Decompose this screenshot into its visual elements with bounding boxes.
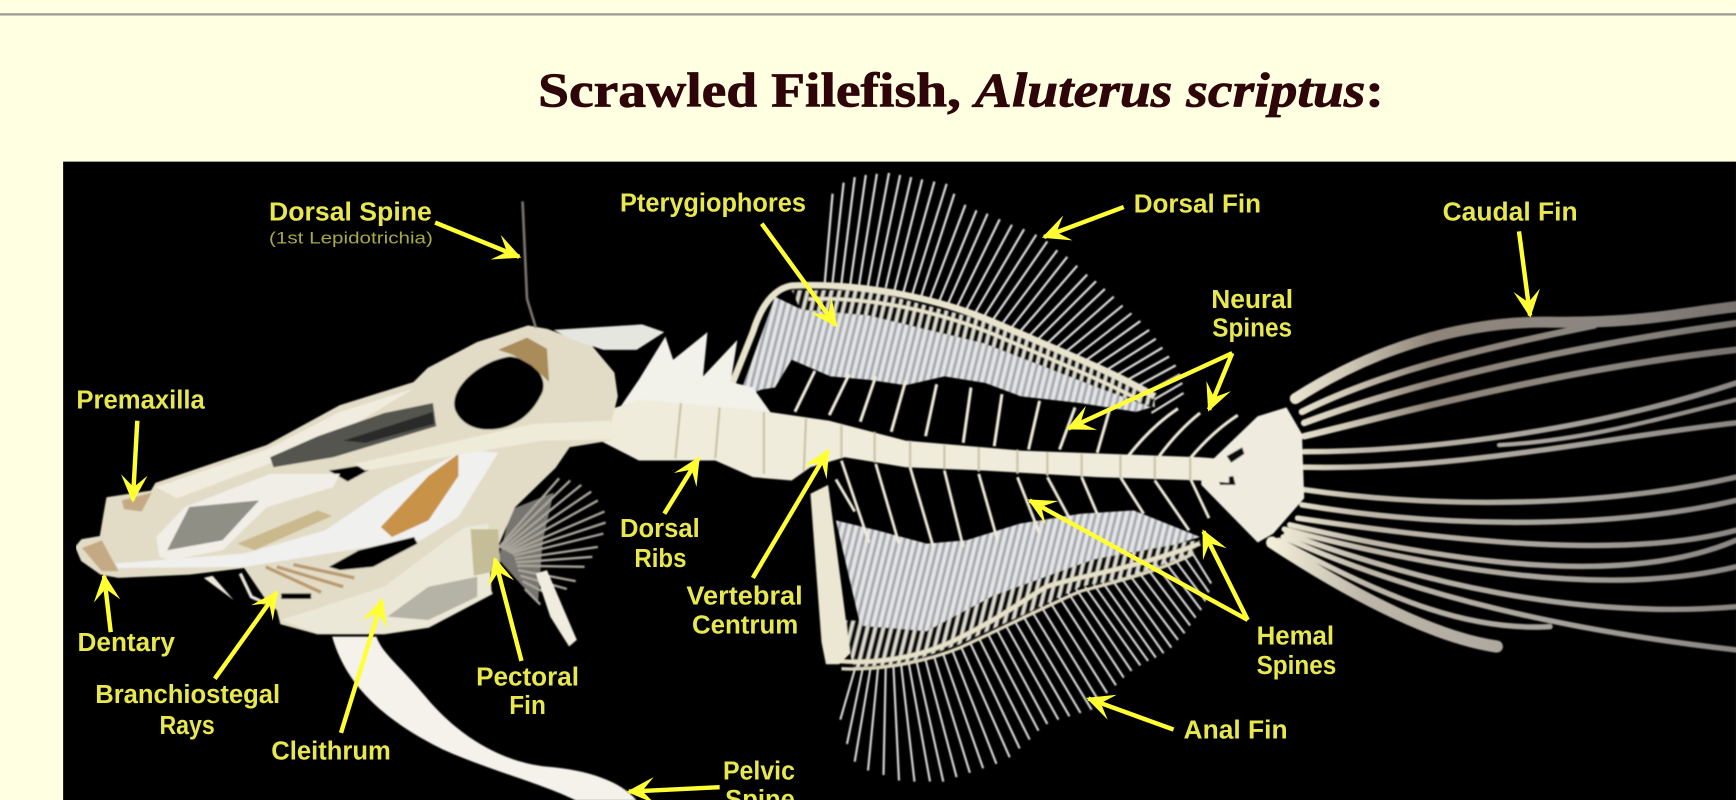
vertebral column bbox=[600, 400, 1229, 483]
caudal fin bbox=[1272, 307, 1736, 650]
arrow: pterygiophores bbox=[762, 224, 836, 325]
arrow: pelvic spine bbox=[629, 787, 720, 792]
label: Branchiostegal Rays: Branchiostegal bbox=[95, 681, 280, 709]
skull black gap bbox=[329, 462, 384, 482]
label: Vertebral Centrum: Centrum bbox=[692, 611, 798, 639]
arrow: dentary bbox=[104, 576, 111, 632]
skull roof highlight bbox=[156, 389, 414, 498]
anal strut bbox=[810, 485, 850, 664]
arrow: pectoral fin bbox=[495, 559, 521, 661]
eye socket bbox=[454, 356, 544, 430]
dorsal inner rail bbox=[808, 299, 1140, 401]
pectoral fin bbox=[498, 478, 606, 647]
arrow: anal fin bbox=[1088, 699, 1174, 730]
jaw spike bbox=[204, 576, 234, 600]
label: Dentary: Dentary bbox=[78, 629, 176, 657]
label: Dorsal Ribs bbox=[620, 515, 700, 573]
label: Pectoral Fin bbox=[476, 663, 579, 720]
arrow: dorsal ribs bbox=[664, 458, 699, 514]
orbit brown rim bbox=[498, 338, 549, 382]
arrow: caudal fin bbox=[1519, 231, 1530, 316]
arrow: premaxilla bbox=[133, 421, 137, 500]
pelvic spine bbox=[332, 637, 637, 800]
label: Vertebral Centrum bbox=[686, 582, 803, 639]
dorsal rail bbox=[726, 285, 1155, 399]
pectoral base bbox=[471, 529, 500, 576]
skull bbox=[76, 327, 617, 633]
title: Scrawled Filefish, Aluterus scriptus : bbox=[538, 63, 1384, 117]
branchiostegal strands bbox=[266, 565, 354, 592]
label: Anal Fin: Anal Fin bbox=[1184, 716, 1288, 744]
label: Neural Spines: Neural bbox=[1211, 286, 1293, 314]
dorsal fin ray bases bbox=[792, 290, 1155, 407]
arrow: cleithrum bbox=[341, 600, 382, 733]
arrow: dorsal fin bbox=[1044, 207, 1124, 237]
anal fin rays bbox=[840, 551, 1211, 782]
label: Dorsal Ribs: Dorsal bbox=[620, 515, 700, 543]
pterygiophores dorsal bbox=[737, 297, 1151, 412]
mid white plate bbox=[115, 449, 498, 568]
label: Caudal Fin: Caudal Fin bbox=[1443, 198, 1578, 226]
label: Neural Spines bbox=[1211, 286, 1293, 343]
arrows: hemal spines bbox=[1030, 500, 1248, 620]
label: Pectoral Fin: Pectoral bbox=[476, 663, 579, 691]
jaw plate grey bbox=[167, 500, 259, 550]
hypural holes bbox=[1218, 447, 1244, 485]
label: Premaxilla: Premaxilla bbox=[76, 387, 206, 415]
label: Hemal Spines bbox=[1257, 622, 1336, 680]
skull grey window bbox=[270, 403, 436, 467]
anal fin ray bases bbox=[841, 540, 1200, 668]
anal fin pale band bbox=[836, 510, 1200, 631]
anal rail bbox=[836, 544, 1200, 662]
arrow: dorsal spine bbox=[435, 223, 519, 257]
vertebra marks bbox=[675, 403, 1190, 480]
branchiostegal ray bbox=[240, 573, 266, 603]
label: Pectoral Fin: Fin bbox=[509, 692, 546, 720]
anterior neural spines bbox=[620, 332, 775, 418]
hemal spines bbox=[836, 461, 1209, 547]
label: Pelvic Spine bbox=[723, 757, 795, 800]
skeleton illustration bbox=[76, 173, 1736, 800]
cleithrum plate bbox=[281, 524, 492, 633]
dorsal fin rays bbox=[825, 173, 1184, 413]
dark window core bbox=[343, 412, 434, 443]
cleithrum shadow bbox=[388, 577, 477, 620]
left plate bbox=[156, 474, 340, 560]
label: Vertebral Centrum: Vertebral bbox=[686, 582, 803, 610]
label: Cleithrum: Cleithrum bbox=[271, 737, 391, 765]
spine rest bone bbox=[554, 324, 664, 350]
dorsal spine bbox=[523, 201, 536, 328]
label: Branchiostegal Rays: Rays bbox=[159, 712, 215, 740]
label: Branchiostegal Rays bbox=[95, 681, 280, 740]
orange patch bbox=[381, 454, 458, 537]
label: Pelvic Spine: Pelvic bbox=[723, 757, 795, 785]
mouth gap bbox=[329, 537, 417, 570]
snout tan bbox=[82, 493, 152, 571]
arrows: neural spines bbox=[1068, 353, 1232, 428]
tan band bbox=[237, 510, 332, 550]
label: Neural Spines: Spines bbox=[1212, 315, 1292, 343]
panel: black photo background bbox=[63, 162, 1736, 800]
neck bone bbox=[354, 421, 614, 471]
label: Dorsal Fin: Dorsal Fin bbox=[1134, 191, 1261, 219]
label: Pterygiophores: Pterygiophores bbox=[620, 189, 806, 217]
top rule bbox=[0, 13, 1736, 15]
label: Dorsal Ribs: Ribs bbox=[634, 545, 686, 573]
arrow: vertebral centrum bbox=[753, 451, 828, 578]
label: Hemal Spines: Hemal bbox=[1257, 622, 1334, 650]
label: Dorsal Spine: Dorsal Spine bbox=[269, 198, 432, 226]
anal lower rail bbox=[841, 554, 1193, 669]
label: Hemal Spines: Spines bbox=[1257, 652, 1336, 680]
neural spines bbox=[795, 371, 1238, 458]
gill gap bbox=[281, 593, 311, 599]
hypural plate bbox=[1201, 407, 1304, 542]
arrow: branchiostegal rays bbox=[215, 592, 277, 679]
label: 1st Lepidotrichia: (1st Lepidotrichia) bbox=[269, 229, 433, 248]
